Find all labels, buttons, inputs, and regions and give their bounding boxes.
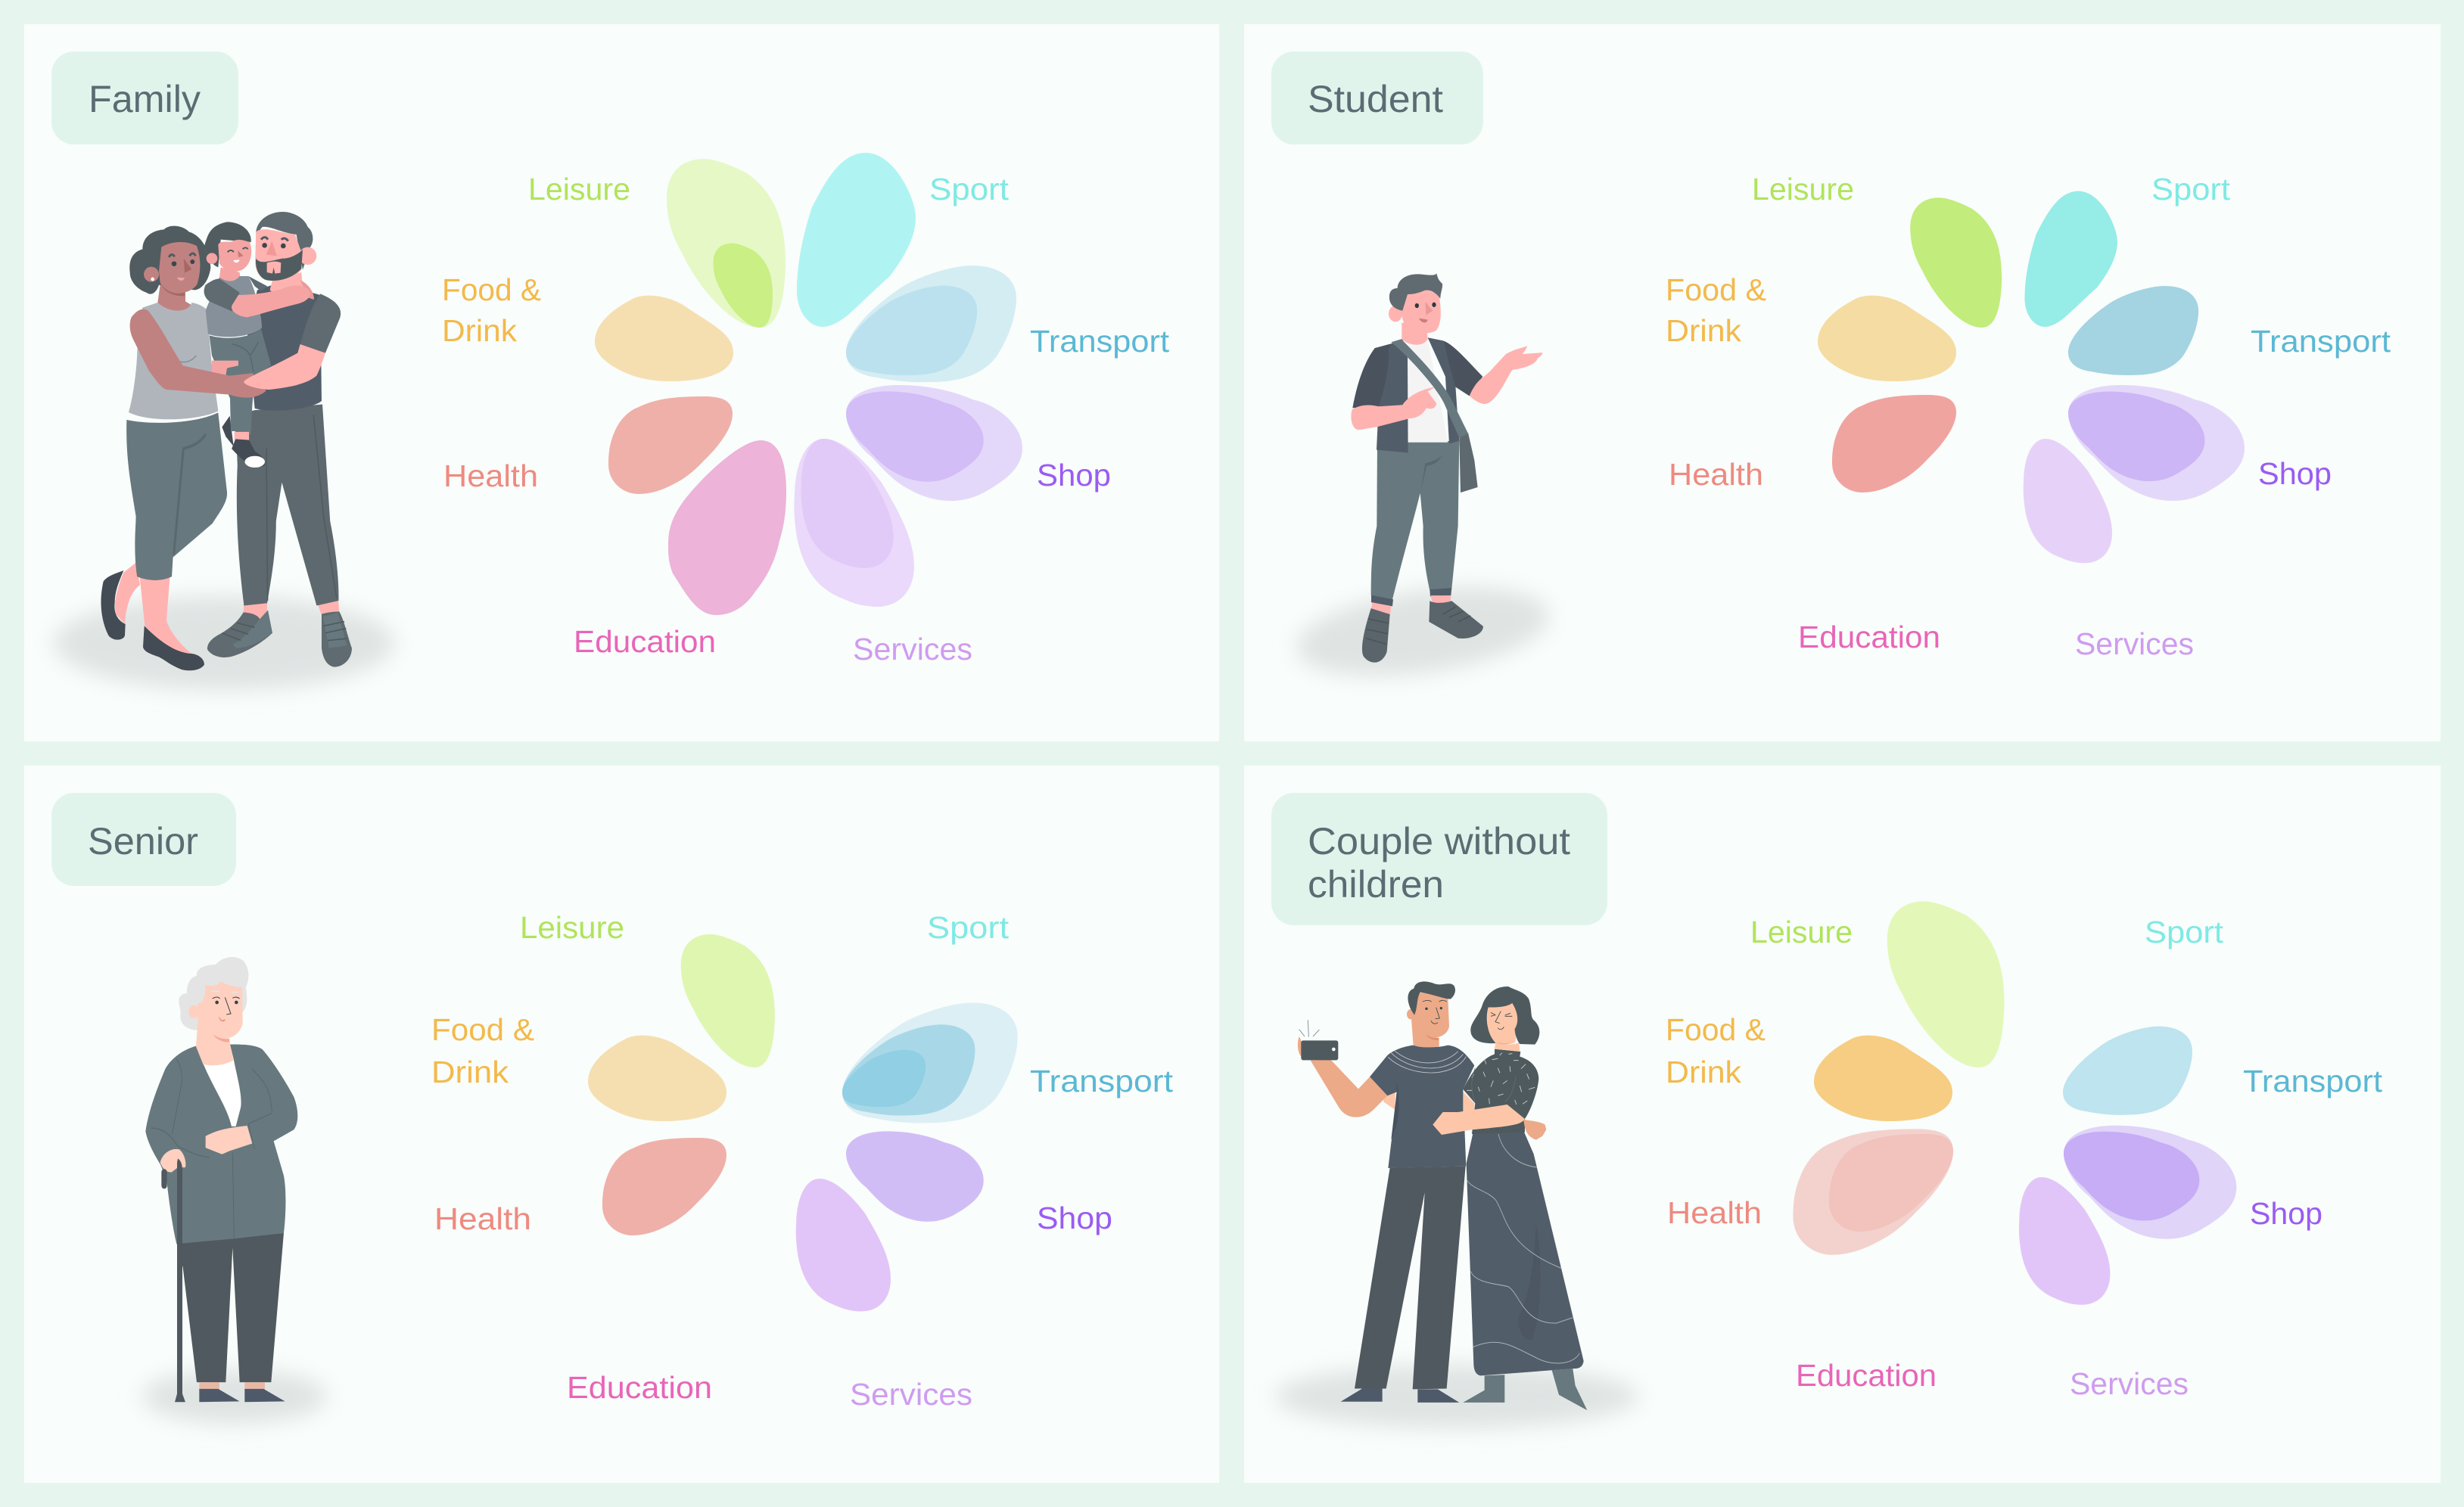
labels: Senior	[431, 910, 1174, 1412]
labels: Couple: Health	[1667, 1195, 1762, 1230]
illustration: family hugging	[101, 212, 352, 670]
illustration: senior with cane	[145, 957, 297, 1402]
panel: Family	[24, 24, 1219, 741]
labels: Couple: Food &	[1666, 1012, 1766, 1047]
heading: Senior	[51, 793, 236, 886]
labels: Senior: Leisure	[520, 910, 624, 945]
labels: Family: Sport	[929, 172, 1010, 207]
heading: Family: Family	[89, 78, 201, 120]
chart: Couple flower	[1793, 901, 2236, 1305]
illustration: couple taking selfie	[1298, 981, 1587, 1410]
labels: Senior: Food &	[431, 1012, 534, 1047]
labels: Couple: Leisure	[1750, 915, 1853, 949]
labels: Senior: Services	[850, 1377, 972, 1412]
heading: Senior: Senior	[88, 820, 198, 862]
labels: Student: Drink	[1666, 313, 1742, 348]
labels: Senior: Shop	[1037, 1201, 1112, 1235]
illustration shadow: Senior	[142, 1369, 327, 1424]
labels: Student: Transport	[2251, 324, 2391, 359]
labels: Couple	[1666, 915, 2383, 1401]
panel: Senior	[24, 766, 1219, 1483]
labels: Senior: Health	[434, 1201, 531, 1236]
labels: Student	[1666, 172, 2391, 661]
heading: Couple without children	[1271, 793, 1607, 925]
heading: Student: Student	[1308, 78, 1443, 120]
labels: Family: Leisure	[528, 172, 630, 207]
labels: Family: Transport	[1030, 324, 1170, 359]
illustration shadow: Family	[54, 596, 394, 690]
labels: Senior: Education	[567, 1370, 712, 1405]
labels: Family: Education	[574, 624, 716, 659]
labels: Student: Leisure	[1752, 172, 1854, 207]
labels: Student: Education	[1798, 620, 1940, 654]
labels: Couple: Drink	[1666, 1055, 1742, 1089]
heading: Student	[1271, 51, 1483, 144]
labels: Student: Food &	[1666, 272, 1766, 307]
chart: Family flower	[595, 153, 1022, 615]
labels: Student: Health	[1669, 457, 1763, 492]
labels: Student: Shop	[2258, 456, 2332, 491]
labels: Senior: Drink	[431, 1055, 509, 1089]
labels: Student: Services	[2075, 626, 2194, 661]
labels: Family: Services	[853, 632, 972, 666]
labels: Couple: Services	[2070, 1366, 2189, 1401]
labels: Family: Health	[443, 458, 538, 493]
illustration shadow: Couple	[1275, 1365, 1638, 1428]
labels: Family: Food &	[442, 272, 541, 307]
labels: Family: Drink	[442, 313, 518, 348]
labels: Student: Sport	[2151, 172, 2231, 207]
heading: Couple without children: children	[1308, 863, 1444, 906]
heading: Family	[51, 51, 238, 144]
labels: Family	[442, 172, 1170, 666]
illustration: student with bag	[1351, 273, 1542, 663]
chart: Senior flower	[588, 934, 1018, 1311]
labels: Senior: Sport	[927, 910, 1010, 945]
illustration shadow: Student	[1291, 573, 1554, 690]
chart: Student flower	[1818, 191, 2245, 563]
labels: Couple: Education	[1796, 1358, 1937, 1393]
heading: Couple without children: Couple without	[1308, 820, 1570, 862]
labels: Family: Shop	[1037, 458, 1111, 492]
panel: Couple without children	[1244, 766, 2441, 1483]
labels: Couple: Transport	[2243, 1064, 2383, 1098]
labels: Couple: Shop	[2250, 1196, 2322, 1231]
labels: Couple: Sport	[2145, 915, 2224, 949]
panel: Student	[1244, 24, 2441, 741]
labels: Senior: Transport	[1030, 1064, 1174, 1098]
